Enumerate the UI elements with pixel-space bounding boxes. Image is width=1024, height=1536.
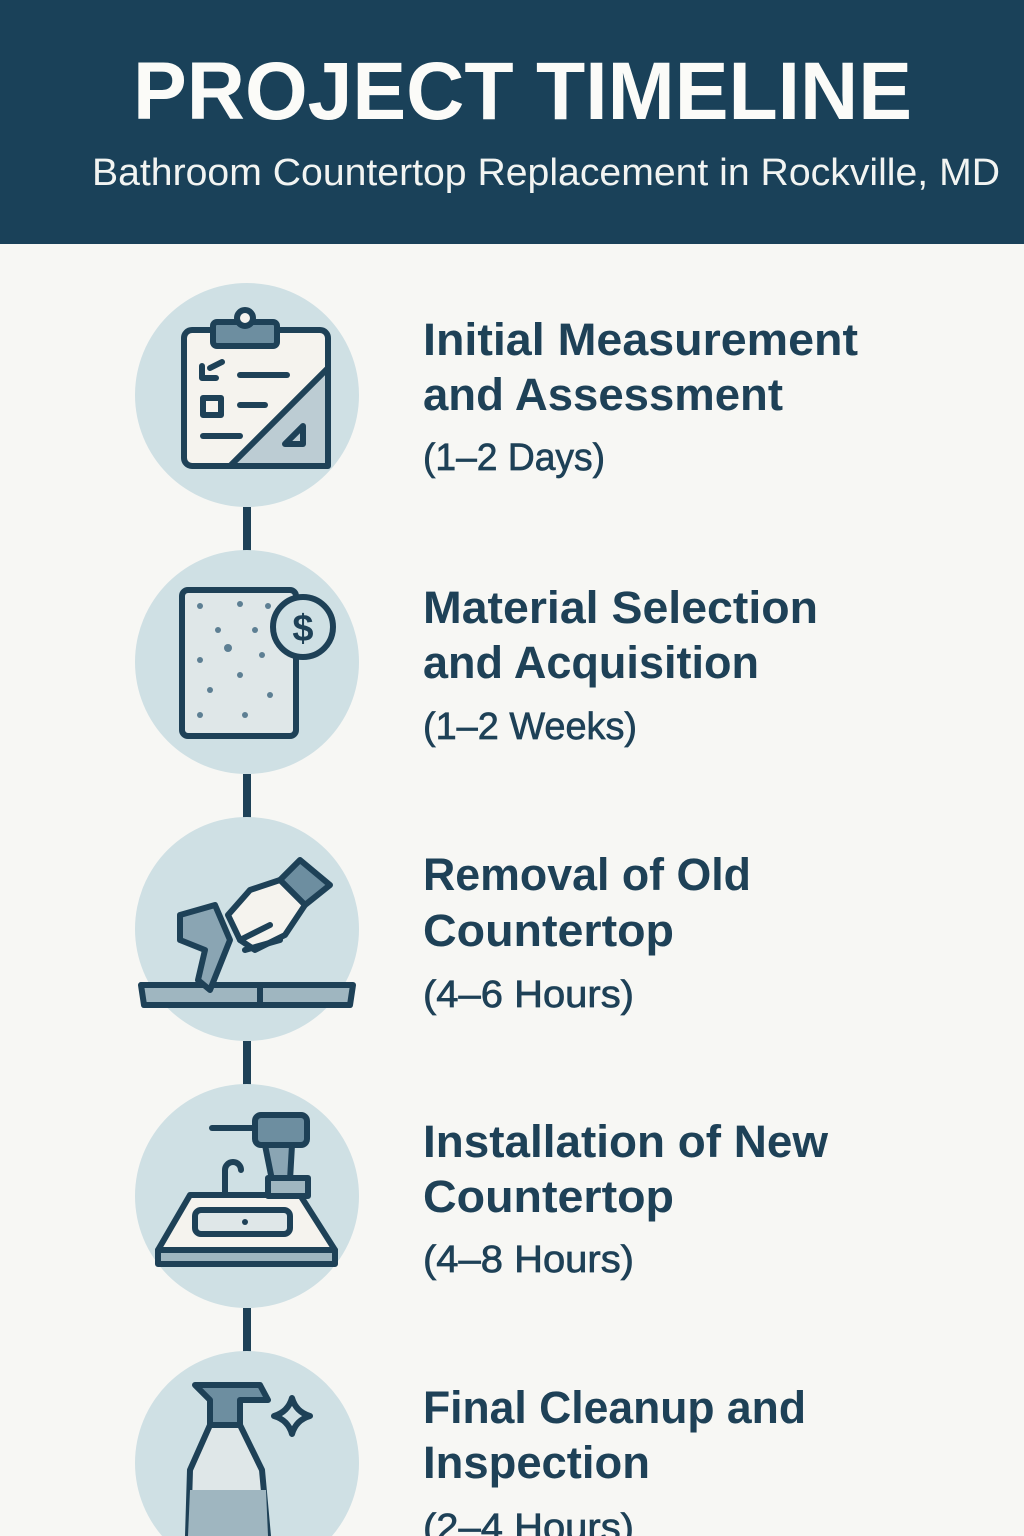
timeline connectors xyxy=(243,507,251,1352)
header banner xyxy=(0,0,1024,244)
icon: hand with hammer on countertop xyxy=(135,817,359,1041)
step 3 text xyxy=(423,849,751,1016)
title: PROJECT TIMELINE xyxy=(133,46,912,137)
step 3 text: Removal of Old xyxy=(423,849,751,900)
step 1 text xyxy=(423,314,858,479)
step 3 text: Countertop xyxy=(423,905,674,956)
step 4 text: (4–8 Hours) xyxy=(423,1239,634,1281)
step 4 text: Installation of New xyxy=(423,1116,829,1167)
step 4 text: Countertop xyxy=(423,1171,674,1222)
step 1 text: and Assessment xyxy=(423,369,783,420)
step 2 text: and Acquisition xyxy=(423,637,759,688)
step 5 text: Inspection xyxy=(423,1437,650,1488)
step 2 text xyxy=(423,582,818,748)
step 3 text: (4–6 Hours) xyxy=(423,974,634,1016)
step 2 text: Material Selection xyxy=(423,582,818,633)
step 1 text: Initial Measurement xyxy=(423,314,858,365)
icon: stone slab with price tag: $ xyxy=(292,608,314,650)
icon: stone slab with price tag xyxy=(135,550,359,774)
subtitle: Bathroom Countertop Replacement in Rockville, MD xyxy=(92,152,1000,194)
icon: drill and sink xyxy=(135,1084,359,1308)
icon: clipboard and triangle ruler xyxy=(135,283,359,507)
step 2 text: (1–2 Weeks) xyxy=(423,706,637,748)
step 5 text: Final Cleanup and xyxy=(423,1382,806,1433)
step 4 text xyxy=(423,1116,829,1281)
step 5 text xyxy=(423,1382,806,1536)
icon: spray bottle xyxy=(135,1351,359,1536)
step 1 text: (1–2 Days) xyxy=(423,437,605,479)
